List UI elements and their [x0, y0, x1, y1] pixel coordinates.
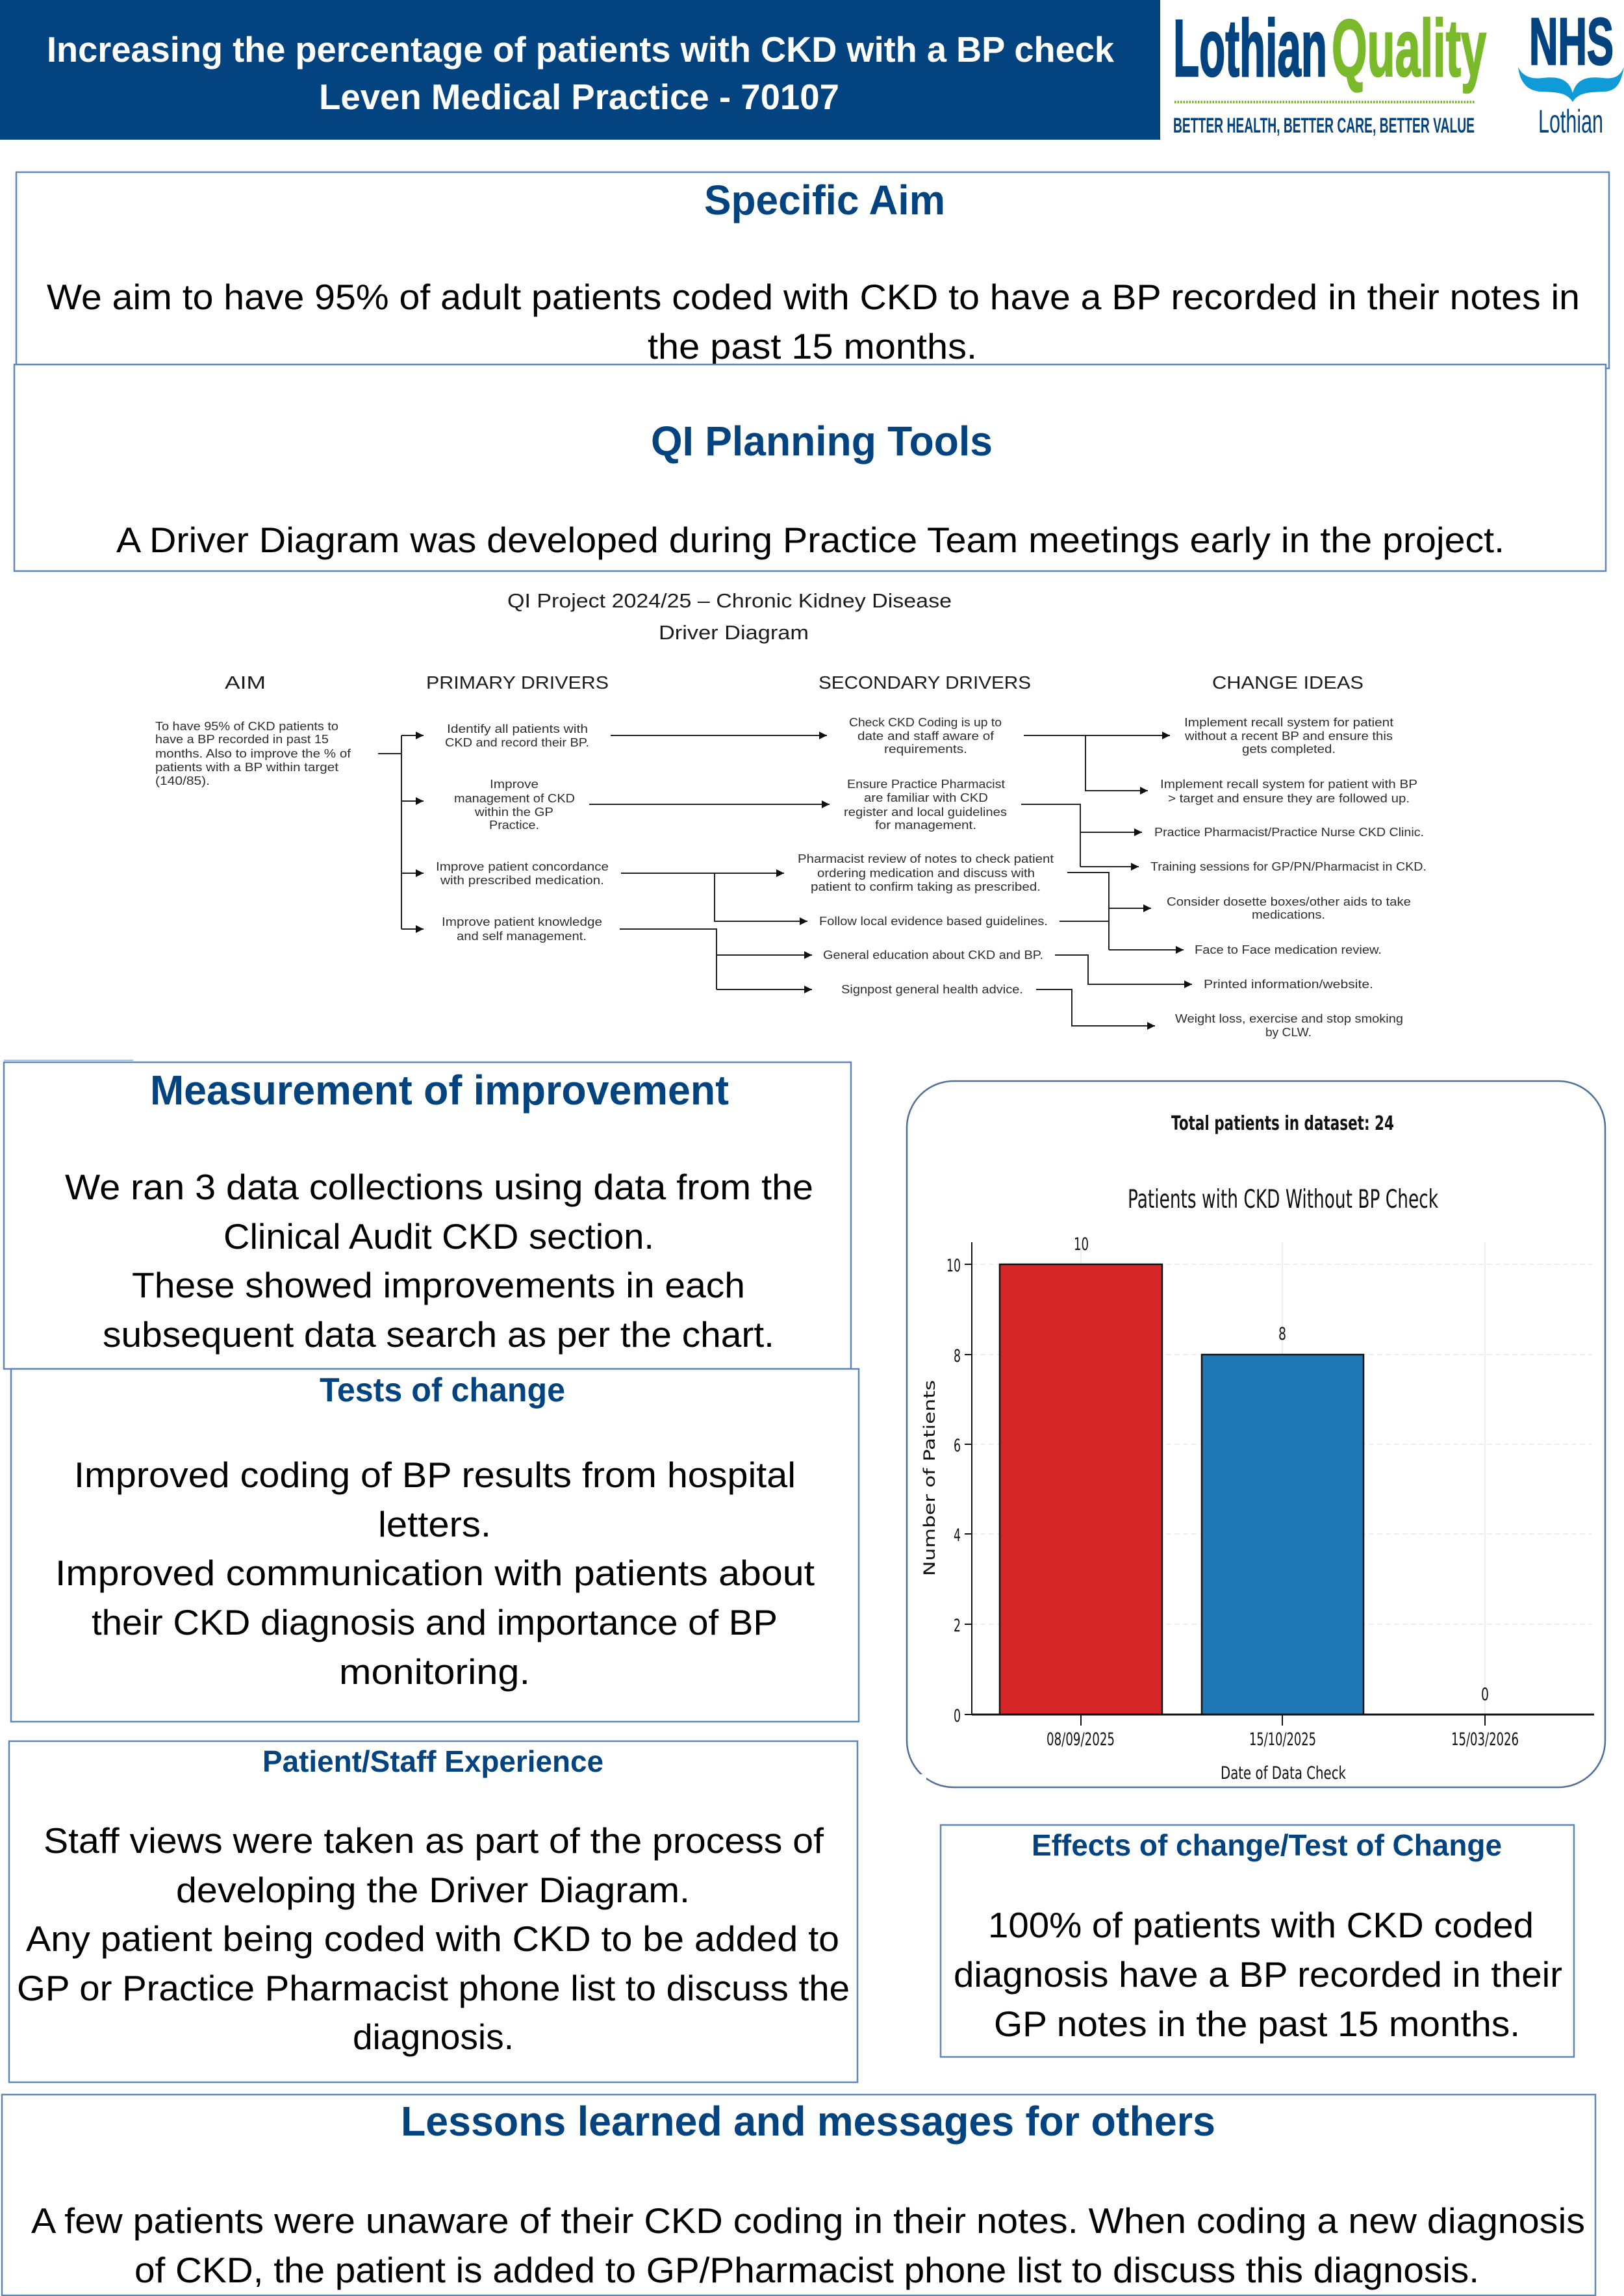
chart title: Patients with CKD Without BP Check: [1128, 1185, 1438, 1214]
lessons learned text: of CKD, the patient is added to GP/Pharmacist phone list to discuss this diagnosis.: [134, 2250, 1479, 2290]
secondary drivers text: Signpost general health advice.: [841, 982, 1023, 996]
effects of change text: 100% of patients with CKD coded: [988, 1905, 1534, 1945]
secondary drivers text: General education about CKD and BP.: [823, 948, 1043, 962]
measurement text: subsequent data search as per the chart.: [103, 1314, 774, 1355]
change ideas text: without a recent BP and ensure this: [1184, 729, 1393, 743]
column headings: SECONDARY DRIVERS: [818, 672, 1031, 693]
aim column text: patients with a BP within target: [155, 760, 338, 774]
patient/staff text: Staff views were taken as part of the process of: [44, 1820, 824, 1861]
effects of change text: diagnosis have a BP recorded in their: [954, 1954, 1562, 1995]
primary drivers text: CKD and record their BP.: [445, 735, 589, 749]
tests of change text: monitoring.: [339, 1652, 530, 1692]
change ideas text: Training sessions for GP/PN/Pharmacist in CKD.: [1150, 860, 1427, 873]
secondary drivers text: ordering medication and discuss with: [817, 866, 1035, 880]
aim column text: have a BP recorded in past 15: [155, 732, 329, 746]
secondary drivers text: Pharmacist review of notes to check patient: [798, 852, 1054, 865]
x axis tick labels: 15/10/2025: [1249, 1729, 1316, 1750]
column headings: PRIMARY DRIVERS: [426, 672, 609, 693]
primary drivers text: Identify all patients with: [447, 722, 588, 735]
bar value labels: [1074, 1234, 1489, 1705]
change ideas text: Implement recall system for patient: [1184, 715, 1393, 729]
logo: Lothian Quality: Lothian: [1173, 4, 1327, 94]
x axis label: Date of Data Check: [1221, 1763, 1346, 1783]
heading: QI planning tools: QI Planning Tools: [651, 418, 993, 465]
primary drivers text: Improve patient concordance: [436, 860, 609, 873]
title banner: Increasing the percentage of patients with CKD with a BP check: [47, 29, 1114, 70]
change ideas text: medications.: [1252, 908, 1325, 921]
secondary drivers text: for management.: [875, 818, 976, 832]
primary drivers text: management of CKD: [454, 791, 575, 805]
primary drivers text: with prescribed medication.: [440, 873, 604, 887]
heading: specific aim: Specific Aim: [704, 177, 945, 223]
patient/staff text: developing the Driver Diagram.: [176, 1870, 690, 1910]
secondary drivers text: Follow local evidence based guidelines.: [819, 914, 1048, 928]
bar: 08/09/2025: [1000, 1264, 1162, 1715]
panel: patient/staff experience: [9, 1741, 857, 2082]
measurement text: [65, 1167, 813, 1355]
aim column text: [155, 719, 351, 787]
change ideas text: Weight loss, exercise and stop smoking: [1175, 1012, 1403, 1025]
chart note: total patients: Total patients in dataset: 24: [1171, 1112, 1394, 1135]
patient/staff text: GP or Practice Pharmacist phone list to discuss the: [17, 1968, 850, 2008]
aim column text: months. Also to improve the % of: [155, 746, 351, 760]
logo: NHS Lothian: [1518, 5, 1624, 140]
panel: measurement of improvement: [4, 1060, 851, 1369]
change ideas text: > target and ensure they are followed up.: [1168, 791, 1410, 805]
secondary drivers text: Check CKD Coding is up to: [849, 715, 1002, 729]
panel: bar chart: [907, 1081, 1605, 1787]
primary drivers text: and self management.: [457, 929, 587, 943]
measurement text: We ran 3 data collections using data from the: [65, 1167, 813, 1207]
primary drivers text: Practice.: [489, 818, 539, 832]
change ideas text: gets completed.: [1242, 742, 1336, 756]
secondary drivers text: are familiar with CKD: [864, 791, 988, 804]
y axis tick labels: 8: [954, 1346, 961, 1366]
primary drivers text: [436, 722, 609, 943]
chart gridlines: [972, 1242, 1592, 1715]
bar value labels: 8: [1278, 1324, 1286, 1344]
measurement text: These showed improvements in each: [132, 1265, 745, 1305]
bar: 15/10/2025: [1202, 1355, 1364, 1715]
column headings: CHANGE IDEAS: [1212, 672, 1364, 693]
change ideas text: [1150, 715, 1427, 1039]
lessons learned text: [31, 2200, 1585, 2290]
y axis tick labels: 6: [954, 1436, 961, 1456]
primary drivers text: within the GP: [474, 805, 553, 819]
panel: tests of change: [11, 1369, 859, 1722]
tests of change text: [55, 1455, 815, 1692]
diagram title: Driver Diagram: [659, 621, 809, 644]
tests of change text: Improved communication with patients about: [55, 1553, 815, 1593]
column headings: AIM: [225, 672, 266, 693]
logo: Lothian Quality: Quality: [1332, 4, 1486, 94]
secondary drivers text: register and local guidelines: [844, 805, 1007, 819]
bar value labels: 10: [1074, 1234, 1089, 1255]
effects of change text: [954, 1905, 1562, 2044]
title banner: Leven Medical Practice - 70107: [319, 77, 839, 117]
aim text: the past 15 months.: [648, 326, 977, 366]
arrows: aim to primary drivers: [378, 735, 424, 929]
aim text: [47, 277, 1580, 366]
x axis tick labels: 15/03/2026: [1451, 1729, 1519, 1750]
heading: tests of change: Tests of change: [320, 1371, 565, 1409]
secondary drivers text: [798, 715, 1054, 996]
effects of change text: GP notes in the past 15 months.: [994, 2004, 1520, 2044]
QI planning text: A Driver Diagram was developed during Practice Team meetings early in the project.: [116, 520, 1504, 560]
y axis tick labels: 10: [946, 1256, 961, 1276]
lessons learned text: A few patients were unaware of their CKD coding in their notes. When coding a new diagnosis: [31, 2200, 1585, 2241]
logo: Lothian Quality: [1173, 4, 1486, 137]
change ideas text: Printed information/website.: [1204, 977, 1373, 991]
primary drivers text: Improve: [490, 777, 539, 791]
x axis tick labels: [1047, 1729, 1519, 1750]
secondary drivers text: date and staff aware of: [857, 729, 995, 743]
primary drivers text: Improve patient knowledge: [442, 915, 602, 928]
heading: effects of change: Effects of change/Test of Change: [1032, 1828, 1502, 1862]
chart axes: [965, 1242, 1594, 1726]
heading: measurement of improvement: Measurement of improvement: [150, 1067, 729, 1114]
aim column text: (140/85).: [155, 774, 210, 787]
patient/staff text: Any patient being coded with CKD to be added to: [26, 1919, 839, 1959]
y axis tick labels: 0: [954, 1706, 961, 1726]
change ideas text: Practice Pharmacist/Practice Nurse CKD Clinic.: [1154, 825, 1424, 839]
tests of change text: Improved coding of BP results from hospital: [74, 1455, 796, 1495]
column headings: [225, 672, 1364, 693]
x axis tick labels: 08/09/2025: [1047, 1729, 1115, 1750]
change ideas text: by CLW.: [1265, 1025, 1312, 1039]
y axis tick labels: 4: [954, 1525, 961, 1546]
change ideas text: Consider dosette boxes/other aids to take: [1167, 895, 1411, 908]
y axis tick labels: [946, 1256, 961, 1726]
diagram title: [507, 589, 952, 644]
tests of change text: letters.: [378, 1504, 491, 1544]
y axis tick labels: 2: [954, 1616, 961, 1636]
heading: patient/staff experience: Patient/Staff Experience: [262, 1744, 603, 1778]
tests of change text: their CKD diagnosis and importance of BP: [92, 1602, 778, 1642]
secondary drivers text: Ensure Practice Pharmacist: [847, 777, 1005, 791]
title banner: [0, 0, 1160, 140]
arrows: secondary drivers to change ideas: [1021, 735, 1192, 1026]
bar value labels: 0: [1481, 1685, 1489, 1705]
heading: lessons learned: Lessons learned and messages for others: [401, 2098, 1215, 2145]
aim text: We aim to have 95% of adult patients coded with CKD to have a BP recorded in their notes in: [47, 277, 1580, 317]
y axis label: Number of Patients: [920, 1380, 939, 1576]
change ideas text: Face to Face medication review.: [1195, 943, 1382, 956]
panel: specific aim: [16, 172, 1609, 368]
secondary drivers text: requirements.: [884, 742, 967, 756]
secondary drivers text: patient to confirm taking as prescribed.: [811, 880, 1041, 893]
patient/staff text: diagnosis.: [353, 2017, 514, 2057]
arrows: primary to secondary drivers: [589, 735, 830, 989]
panel: QI planning tools: [14, 364, 1606, 571]
aim column text: To have 95% of CKD patients to: [155, 719, 338, 733]
change ideas text: Implement recall system for patient with BP: [1160, 777, 1417, 791]
diagram title: QI Project 2024/25 – Chronic Kidney Disease: [507, 589, 952, 612]
panel: lessons learned: [2, 2095, 1595, 2295]
measurement text: Clinical Audit CKD section.: [223, 1216, 654, 1256]
patient/staff text: [17, 1820, 850, 2057]
driver diagram: [155, 589, 1427, 1039]
panel: effects of change: [941, 1825, 1574, 2057]
